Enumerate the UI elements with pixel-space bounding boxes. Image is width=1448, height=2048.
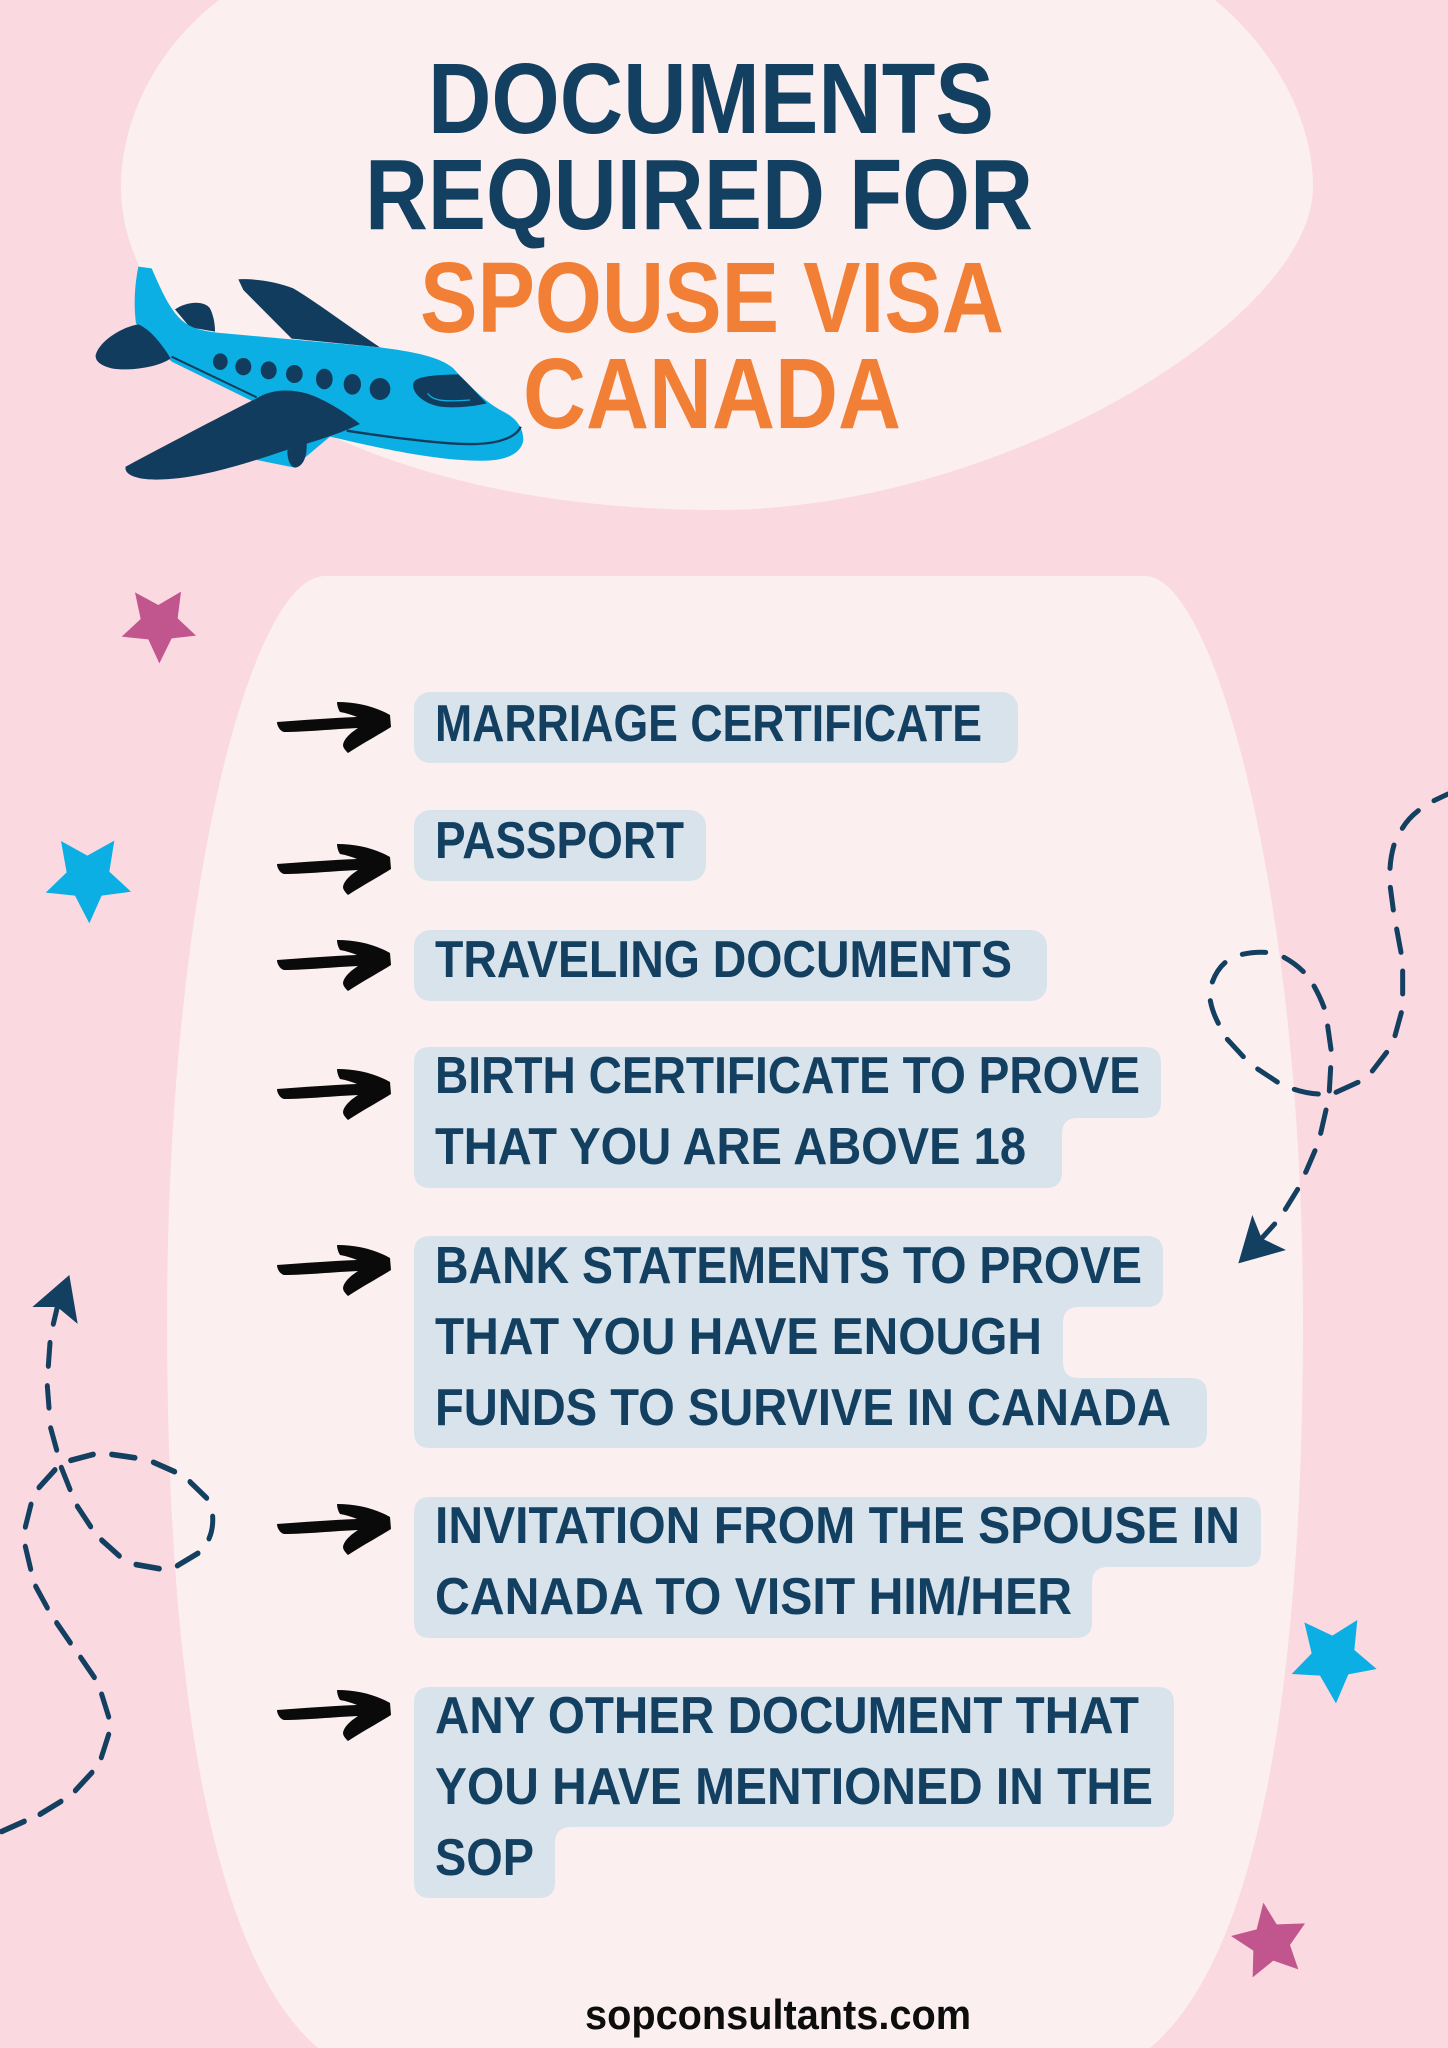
item: passport: PASSPORT xyxy=(435,812,684,870)
item: bank statements: FUNDS TO SURVIVE IN CANADA xyxy=(435,1379,1171,1437)
item: bank statements: THAT YOU HAVE ENOUGH xyxy=(435,1308,1042,1366)
item: bank statements: BANK STATEMENTS TO PROVE xyxy=(435,1237,1142,1295)
item: any other document: ANY OTHER DOCUMENT THAT xyxy=(435,1687,1139,1745)
icon: pink star bottom right xyxy=(1231,1903,1305,1977)
icon: airplane xyxy=(96,267,523,480)
icon: pink star top left xyxy=(122,592,196,663)
item: any other document: YOU HAVE MENTIONED IN THE xyxy=(435,1758,1153,1816)
dashed arrow right xyxy=(1210,794,1448,1263)
icon: blue star right xyxy=(1292,1620,1377,1703)
dashed arrow left xyxy=(2,1275,213,1832)
title xyxy=(365,43,1033,450)
item: marriage certificate xyxy=(277,692,1018,763)
title: DOCUMENTS xyxy=(428,43,994,155)
title: REQUIRED FOR xyxy=(365,139,1033,251)
item: any other document: SOP xyxy=(435,1829,534,1887)
item: invitation from spouse xyxy=(277,1497,1261,1638)
item: bank statements xyxy=(277,1236,1207,1448)
item: invitation from spouse: INVITATION FROM THE SPOUSE IN xyxy=(435,1497,1240,1555)
icon: blue star left xyxy=(46,841,131,923)
item: marriage certificate: MARRIAGE CERTIFICATE xyxy=(435,695,982,753)
title: CANADA xyxy=(523,338,901,450)
item: passport xyxy=(277,810,706,895)
title: SPOUSE VISA xyxy=(420,242,1004,354)
item: birth certificate: BIRTH CERTIFICATE TO PROVE xyxy=(435,1047,1140,1105)
item: traveling documents xyxy=(277,930,1047,1001)
top ellipse panel xyxy=(121,0,1313,510)
item: invitation from spouse: CANADA TO VISIT HIM/HER xyxy=(435,1568,1072,1626)
item: any other document xyxy=(277,1687,1174,1898)
item: traveling documents: TRAVELING DOCUMENTS xyxy=(435,931,1012,989)
item: birth certificate: THAT YOU ARE ABOVE 18 xyxy=(435,1118,1026,1176)
item: birth certificate xyxy=(277,1047,1161,1188)
main list panel xyxy=(167,576,1303,2048)
footer website: sopconsultants.com xyxy=(585,1991,971,2038)
